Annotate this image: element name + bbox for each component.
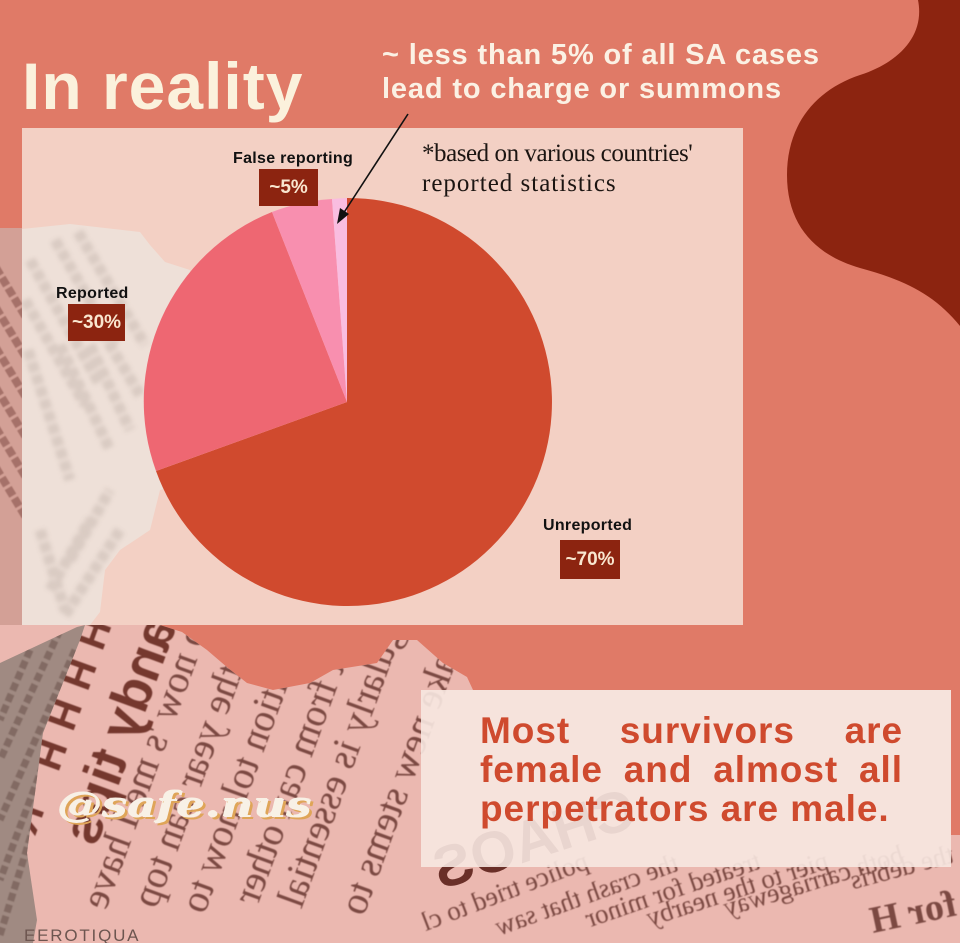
statement text: almost	[713, 749, 838, 790]
label: false reporting: False reporting	[233, 150, 353, 167]
value: unreported	[560, 540, 620, 579]
pie chart	[144, 198, 552, 606]
statement text: perpetrators are male.	[480, 788, 890, 829]
newspaper lines: bottom right: police tried to cl	[417, 846, 592, 937]
newspaper columns	[90, 634, 454, 914]
newspaper lines: bottom right: the crash that saw	[490, 847, 682, 942]
torn paper: bottom newspaper	[0, 609, 960, 943]
statement text: and	[624, 749, 692, 790]
value: reported: ~30%	[72, 312, 121, 333]
label: reported: Reported	[56, 285, 129, 302]
statement text: Most	[480, 710, 570, 751]
newspaper lines: bottom right	[420, 846, 958, 935]
note: statistics source	[422, 140, 692, 197]
statement text	[480, 710, 903, 829]
value: reported	[68, 304, 125, 341]
newspaper columns: ent from can other	[224, 618, 366, 910]
newspaper headline: andy tips	[51, 609, 188, 852]
chart panel background	[22, 128, 743, 625]
value: false reporting	[259, 169, 318, 206]
newspaper headline: HHHH R	[0, 613, 120, 853]
statement text: are	[845, 710, 903, 751]
newspaper columns: b now 's me I have	[72, 618, 216, 914]
statement text: all	[859, 749, 903, 790]
torn paper: inside panel	[22, 224, 202, 625]
newspaper columns: addition tol now to	[170, 618, 316, 918]
newspaper columns: make new stems to	[330, 618, 476, 920]
newspaper lines: bottom right: for H	[866, 883, 960, 942]
arrow: pointer to pie slice	[337, 114, 408, 224]
blob: dark red top right	[787, 0, 960, 326]
newspaper columns: gularly is essential	[267, 618, 411, 913]
grey torn edge	[0, 625, 90, 943]
callout: charge statistics: ~ less than 5% of all SA cases	[382, 39, 820, 71]
callout: charge statistics	[382, 39, 820, 105]
title: In reality	[22, 49, 303, 123]
newspaper lines: bottom right: pier to the nearby	[642, 845, 832, 932]
torn paper: left strip	[0, 228, 22, 625]
newspaper lines: bottom right: the debris	[847, 839, 957, 895]
note: statistics source: reported statistics	[422, 170, 617, 197]
label: unreported: Unreported	[543, 517, 632, 534]
value: false reporting: ~5%	[269, 177, 308, 198]
statement text: female	[480, 749, 603, 790]
newspaper lines: bottom right: both carriageway	[719, 839, 907, 922]
statement text: survivors	[620, 710, 795, 751]
newspaper columns: of the year can top	[122, 618, 266, 913]
value: unreported: ~70%	[565, 549, 615, 570]
callout: charge statistics: lead to charge or summons	[382, 73, 782, 105]
note: statistics source: *based on various countries'	[422, 140, 692, 167]
handle: safe.nus: @safe.nus	[58, 785, 313, 826]
newspaper lines: bottom right: treated for minor	[581, 845, 764, 933]
panel: survivors statement	[421, 690, 951, 867]
newspaper headline: bottom: CHAOS	[425, 776, 644, 902]
